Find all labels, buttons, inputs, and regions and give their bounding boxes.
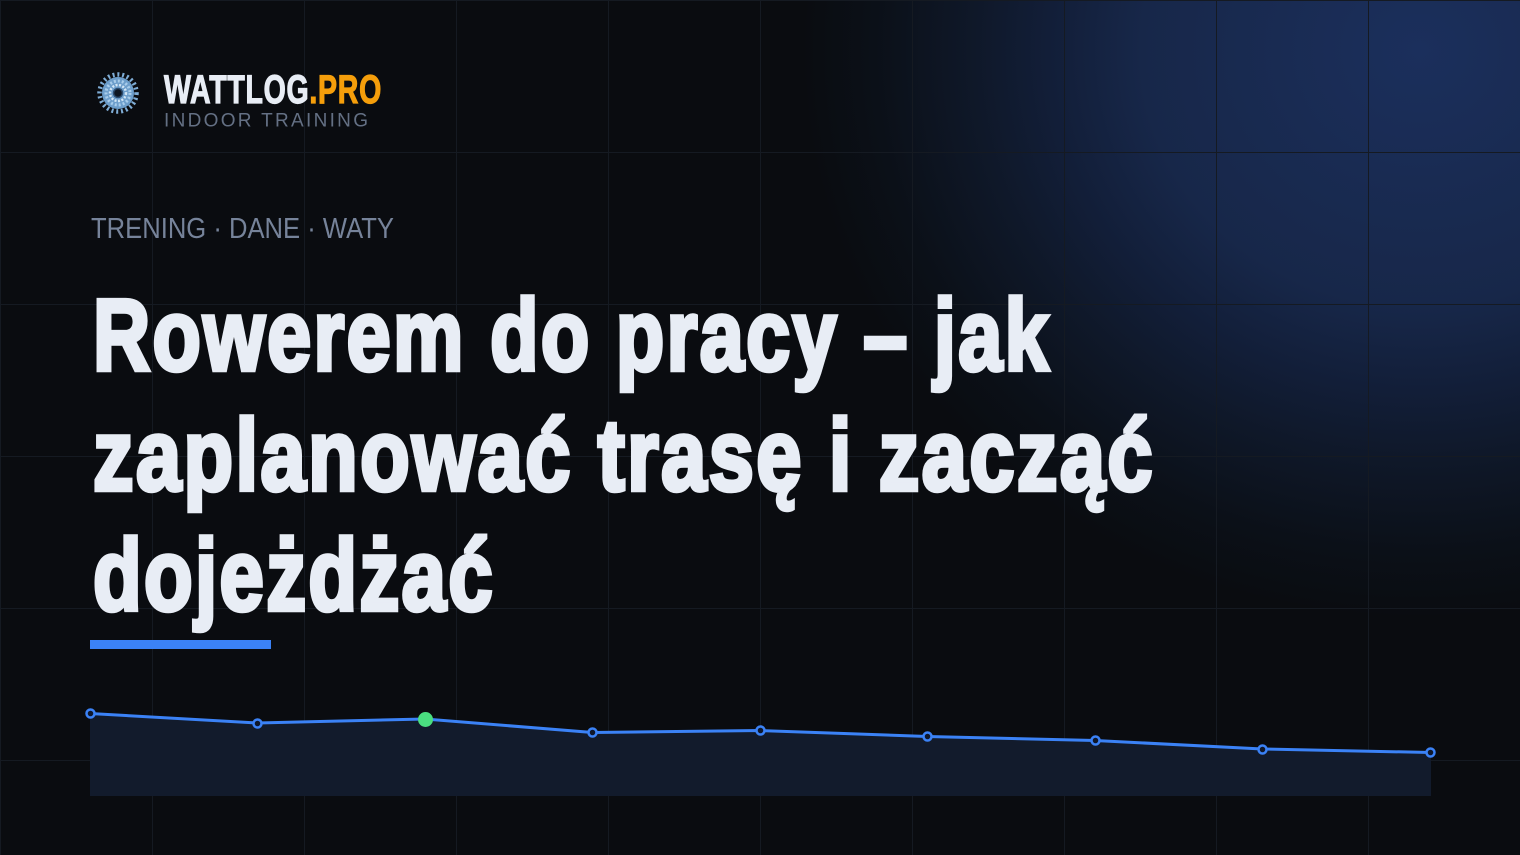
logo: cassette icon and wordmark: [100, 68, 382, 132]
title: [93, 280, 1155, 632]
title: dojeżdżać: [93, 520, 495, 632]
title: Rowerem do pracy – jak: [93, 280, 1051, 392]
chart data points: [86, 710, 1434, 756]
brand name: WATTLOG.PRO: [164, 68, 382, 112]
eyebrow text: TRENING · DANE · WATY: [91, 213, 394, 245]
highlighted data point: [418, 712, 433, 727]
icon: bicycle cassette: [100, 74, 136, 112]
title underline accent: [90, 640, 271, 649]
brand tagline: INDOOR TRAINING: [164, 110, 368, 132]
chart line: [90, 714, 1431, 752]
title: zaplanować trasę i zacząć: [93, 400, 1155, 512]
line chart: wattage over time: [86, 710, 1434, 796]
chart area fill: [90, 714, 1431, 796]
